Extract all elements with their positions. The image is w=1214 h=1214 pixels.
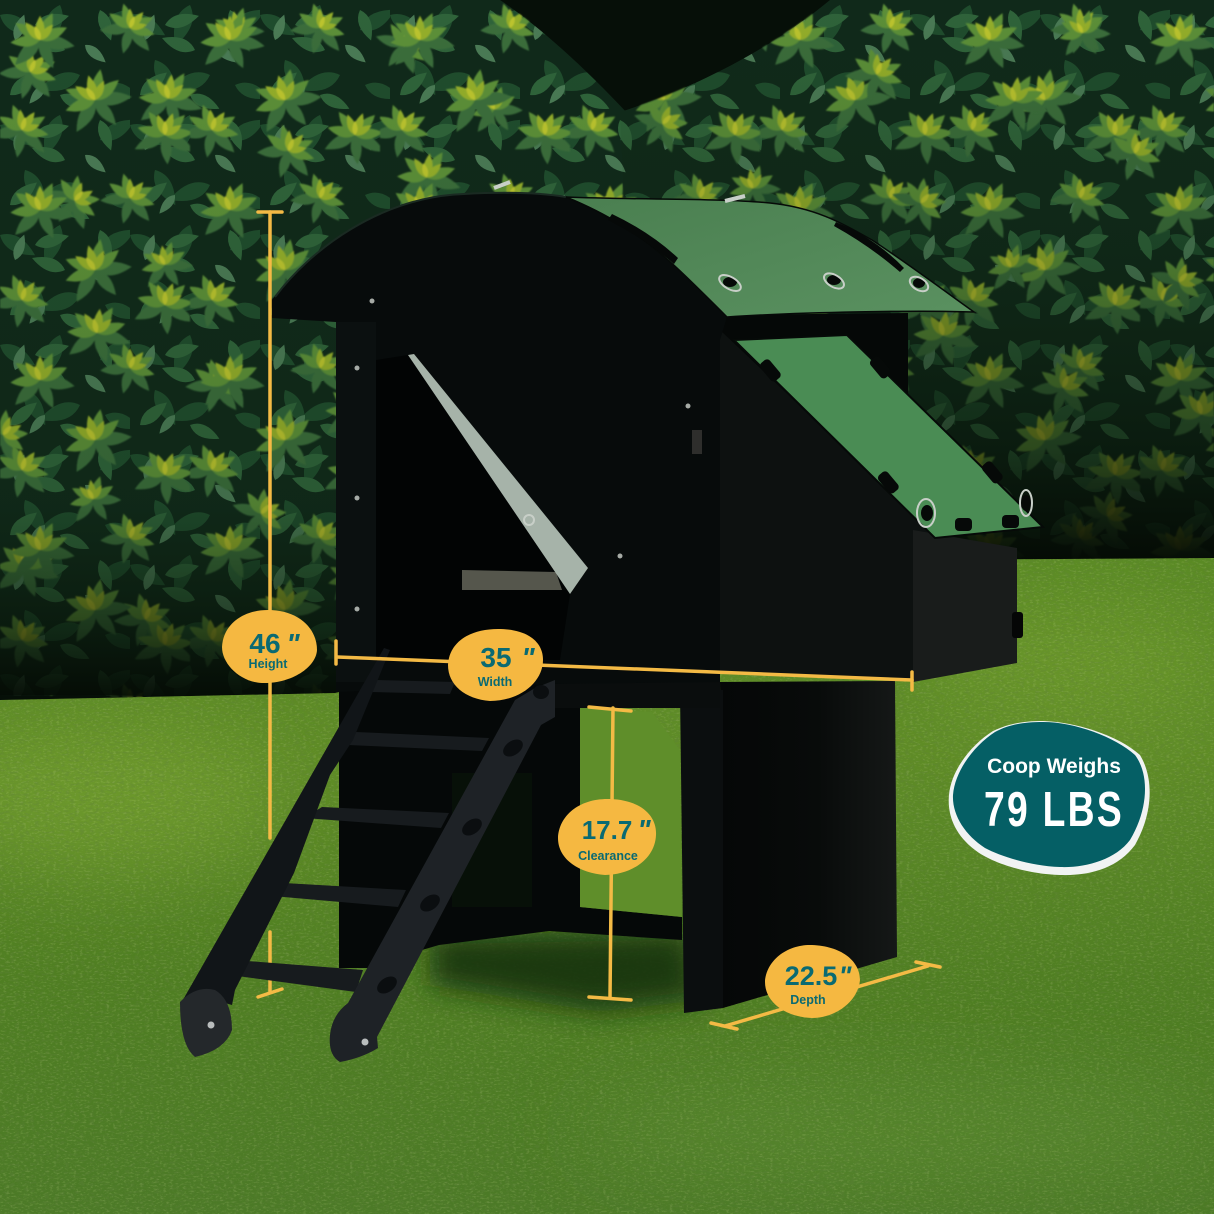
coop: interior under floor — [339, 680, 682, 968]
badge: width 35 inches: 35 — [480, 642, 512, 673]
badge: height 46 inches — [222, 610, 317, 683]
height dimension line — [258, 212, 282, 997]
hedge: left bush — [0, 0, 720, 700]
coop: roof handles and lid fittings — [608, 214, 1031, 531]
stairs: treads — [215, 680, 489, 992]
badge: depth 22.5 inches: Depth — [790, 993, 826, 1007]
coop: under-floor side panel — [720, 681, 897, 1008]
callout: coop weighs 79 lbs — [949, 721, 1150, 875]
coop: clearance opening showing lawn — [580, 708, 682, 917]
coop: open door panel — [408, 354, 588, 594]
coop: nest box bracket — [1012, 612, 1023, 638]
badge: clearance 17.7 inches: " — [637, 814, 651, 845]
stairs: bolts — [374, 685, 549, 997]
depth dimension line — [711, 962, 940, 1029]
coop: bolts — [354, 298, 690, 612]
callout: weight value: 79 LBS — [984, 783, 1124, 837]
callout: white backing shape — [949, 721, 1150, 875]
stairs: left wheel — [180, 989, 232, 1057]
stairs: left stringer — [180, 648, 390, 1005]
stairs — [180, 648, 555, 1062]
background: dark garden gap — [0, 0, 1214, 720]
coop: front wall — [272, 193, 727, 692]
badge: height 46 inches: Height — [249, 657, 288, 671]
coop: front right leg — [680, 690, 723, 1013]
coop: nest box front — [913, 530, 1017, 682]
badge: depth 22.5 inches — [765, 945, 860, 1018]
coop: perch — [462, 570, 562, 590]
coop — [272, 182, 1043, 1013]
callout: teal blob — [953, 722, 1145, 867]
badge: depth 22.5 inches: " — [839, 961, 853, 991]
coop: door latch — [692, 430, 702, 454]
width dimension line — [336, 641, 912, 690]
stairs: wheel axle bolts — [208, 1022, 368, 1046]
badge: height 46 inches: 46 — [249, 628, 281, 659]
coop: roof overhang rim — [275, 193, 566, 297]
lawn — [0, 556, 1214, 1214]
badge: width 35 inches: " — [521, 642, 535, 673]
coop: side wall — [720, 330, 935, 681]
coop: floor band — [555, 680, 720, 708]
coop: interior back wall tint — [452, 773, 532, 907]
coop: metal ring fasteners — [494, 182, 1032, 527]
badge: clearance 17.7 inches — [558, 799, 656, 875]
badge: height 46 inches: " — [286, 628, 300, 659]
badge: clearance 17.7 inches: 17.7 — [582, 815, 632, 845]
coop: left post — [336, 322, 376, 682]
hedge: right bush — [620, 0, 1214, 560]
coop: nest box lid — [734, 335, 1043, 538]
badge: clearance 17.7 inches: Clearance — [578, 849, 638, 863]
coop: door opening — [376, 355, 570, 660]
badge: width 35 inches — [448, 629, 543, 701]
coop: rear wall behind lid — [720, 313, 908, 520]
coop: green roof — [566, 197, 974, 317]
clearance dimension line — [589, 707, 631, 1000]
badge: width 35 inches: Width — [478, 675, 512, 689]
stairs: right stringer — [330, 680, 555, 1062]
callout: label: Coop Weighs — [987, 755, 1121, 778]
badge: depth 22.5 inches: 22.5 — [785, 961, 837, 991]
